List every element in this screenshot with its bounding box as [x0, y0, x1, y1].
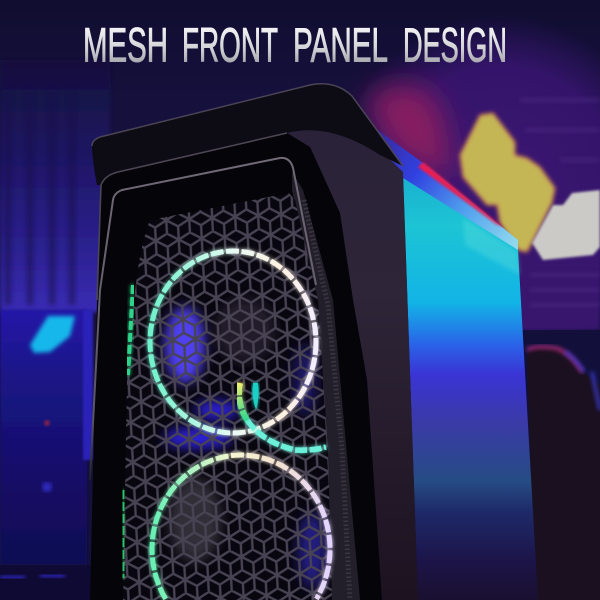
- slatted strip: [292, 172, 360, 600]
- mesh grille: [123, 193, 332, 600]
- lower right: dark room and chair: [523, 330, 600, 600]
- fan ring: bottom: [152, 455, 330, 599]
- light panels: yellow hexagons: [460, 113, 600, 260]
- title: MESH: [83, 20, 168, 72]
- glow: magenta wall: [365, 84, 450, 180]
- title: DESIGN: [403, 20, 507, 72]
- screen reflections: [0, 380, 32, 384]
- monitor: lower left: [0, 310, 93, 600]
- curtain: left blue wall: [0, 60, 110, 312]
- fan ring: top: [150, 251, 316, 433]
- screen highlight: cyan spot: [30, 316, 75, 353]
- title: [83, 20, 507, 72]
- PC case: [90, 84, 538, 600]
- top lid: [92, 84, 403, 185]
- LED strip: left green: [128, 285, 133, 375]
- brick wall: purple: [330, 15, 600, 365]
- side frame: dark purple: [287, 129, 418, 600]
- title: PANEL: [293, 20, 388, 72]
- inner frame outline: [90, 158, 316, 480]
- top edge: blue and red stripe: [372, 130, 518, 250]
- fan ring: middle partial: [247, 420, 326, 450]
- front bezel: [90, 133, 382, 600]
- title: FRONT: [182, 20, 278, 72]
- side panel: blue glass: [403, 175, 538, 600]
- fan glow behind mesh: [123, 193, 332, 600]
